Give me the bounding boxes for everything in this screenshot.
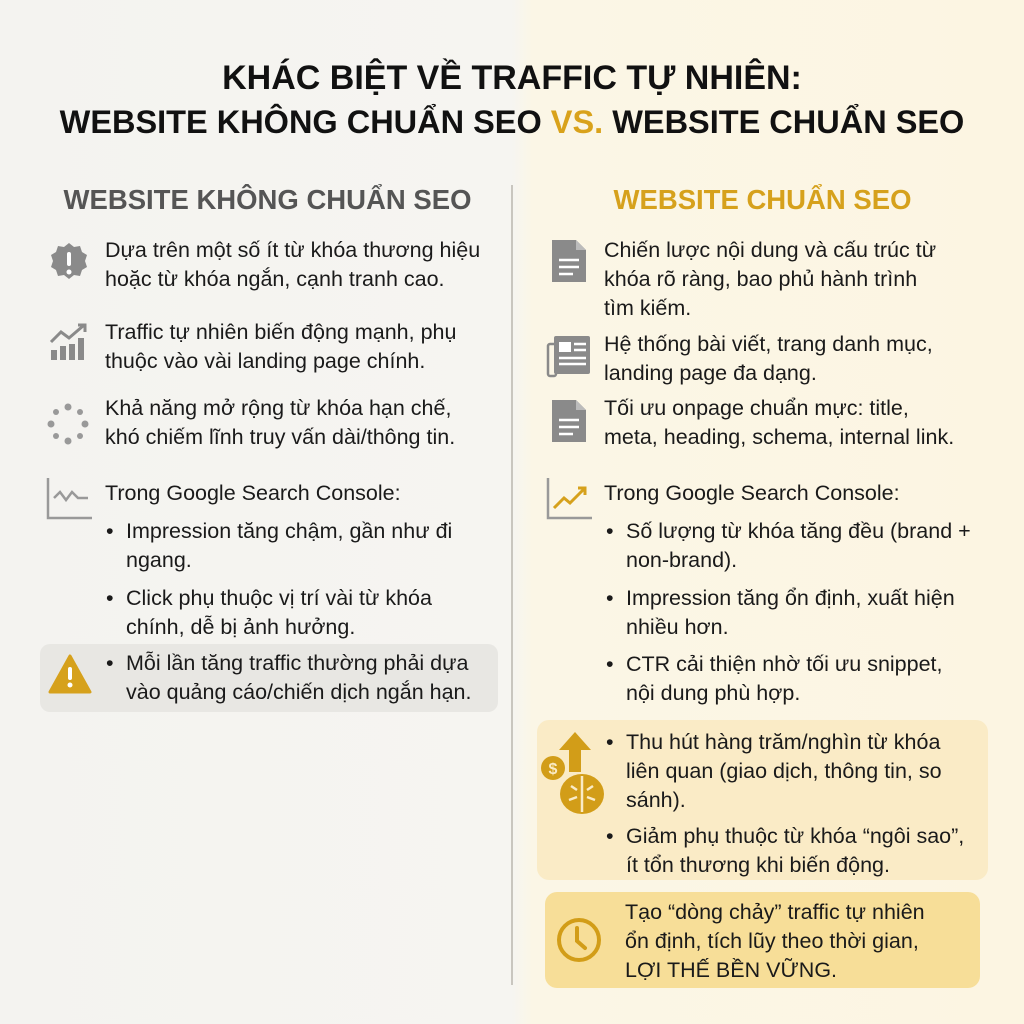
icon: arrow coin brain: $	[549, 761, 558, 778]
icon: bar chart	[50, 324, 86, 360]
text: item 1: Dựa trên một số ít từ khóa thương hiệu	[105, 238, 480, 262]
bullet list: chính, dễ bị ảnh hưởng.	[126, 615, 355, 639]
bullet list: nhiều hơn.	[626, 615, 729, 639]
callout: keywords growth: liên quan (giao dịch, thông tin, so	[626, 759, 942, 783]
text: item 1: hoặc từ khóa ngắn, cạnh tranh cao.	[105, 267, 445, 291]
bullet list: ngang.	[126, 548, 192, 572]
callout: warning: Mỗi lần tăng traffic thường phải dựa	[126, 651, 468, 675]
text: item 3: Khả năng mở rộng từ khóa hạn chế,	[105, 396, 451, 420]
text: item 2	[105, 320, 456, 373]
heading: left column: WEBSITE KHÔNG CHUẨN SEO	[64, 184, 471, 215]
callout: keywords growth: ít tổn thương khi biến động.	[626, 853, 890, 877]
text: item 3	[604, 396, 954, 449]
callout: keywords growth: Thu hút hàng trăm/nghìn từ khóa	[626, 730, 940, 754]
callout: sustainable advantage	[545, 892, 980, 988]
icon: arrow coin brain	[541, 732, 604, 814]
text: item 1	[604, 238, 936, 320]
text: item 3	[105, 396, 455, 449]
text: item 3: khó chiếm lĩnh truy vấn dài/thông tin.	[105, 425, 455, 449]
text: item 1: tìm kiếm.	[604, 296, 691, 320]
text: item 3: Tối ưu onpage chuẩn mực: title,	[604, 396, 909, 420]
callout: keywords growth: sánh).	[626, 788, 686, 812]
bullet list	[606, 519, 971, 705]
text: GSC heading: Trong Google Search Console:	[105, 481, 401, 505]
callout: sustainable advantage: Tạo “dòng chảy” traffic tự nhiên	[625, 900, 925, 924]
bullet list: Impression tăng chậm, gần như đi	[126, 519, 452, 543]
bullet list: CTR cải thiện nhờ tối ưu snippet,	[626, 652, 943, 676]
text: item 2: Traffic tự nhiên biến động mạnh, phụ	[105, 320, 456, 344]
heading: right column: WEBSITE CHUẨN SEO	[614, 184, 911, 215]
text: item 2: thuộc vào vài landing page chính.	[105, 349, 425, 373]
icon: rising chart	[546, 478, 592, 520]
title: WEBSITE KHÔNG CHUẨN SEO VS. WEBSITE CHUẨN SEO	[60, 104, 964, 140]
text: item 1: Chiến lược nội dung và cấu trúc từ	[604, 238, 936, 262]
icon: document 2	[552, 400, 586, 442]
bullet list: Số lượng từ khóa tăng đều (brand +	[626, 519, 971, 543]
text: item 1: khóa rõ ràng, bao phủ hành trình	[604, 267, 917, 291]
callout: keywords growth: Giảm phụ thuộc từ khóa “ngôi sao”,	[626, 824, 964, 848]
text: item 1	[105, 238, 480, 291]
panel: right items	[546, 238, 971, 705]
text: item 2: landing page đa dạng.	[604, 361, 817, 385]
icon: clock	[557, 918, 601, 962]
text: item 2: Hệ thống bài viết, trang danh mục,	[604, 332, 933, 356]
bullet list: non-brand).	[626, 548, 737, 572]
bullet list: Click phụ thuộc vị trí vài từ khóa	[126, 586, 432, 610]
bullet list: nội dung phù hợp.	[626, 681, 800, 705]
callout: keywords growth	[537, 720, 988, 880]
title	[60, 58, 964, 140]
callout: warning: vào quảng cáo/chiến dịch ngắn hạn.	[126, 680, 471, 704]
icon: newspaper	[546, 336, 590, 378]
bullet list: Impression tăng ổn định, xuất hiện	[626, 586, 955, 610]
text: item 2	[604, 332, 933, 385]
callout: sustainable advantage: ổn định, tích lũy theo thời gian,	[625, 929, 919, 953]
panel: left items	[46, 238, 480, 639]
title: KHÁC BIỆT VỀ TRAFFIC TỰ NHIÊN:	[222, 59, 802, 97]
icon: alert badge	[51, 243, 87, 279]
icon: flat line chart	[46, 478, 92, 520]
icon: document	[552, 240, 586, 282]
icon: warning triangle	[48, 654, 92, 694]
text: item 3: meta, heading, schema, internal link.	[604, 425, 954, 449]
callout: sustainable advantage: LỢI THẾ BỀN VỮNG.	[625, 958, 837, 982]
callout: warning	[40, 644, 498, 712]
bullet list	[106, 519, 452, 639]
text: GSC heading: Trong Google Search Console:	[604, 481, 900, 505]
icon: dotted circle	[48, 404, 88, 444]
